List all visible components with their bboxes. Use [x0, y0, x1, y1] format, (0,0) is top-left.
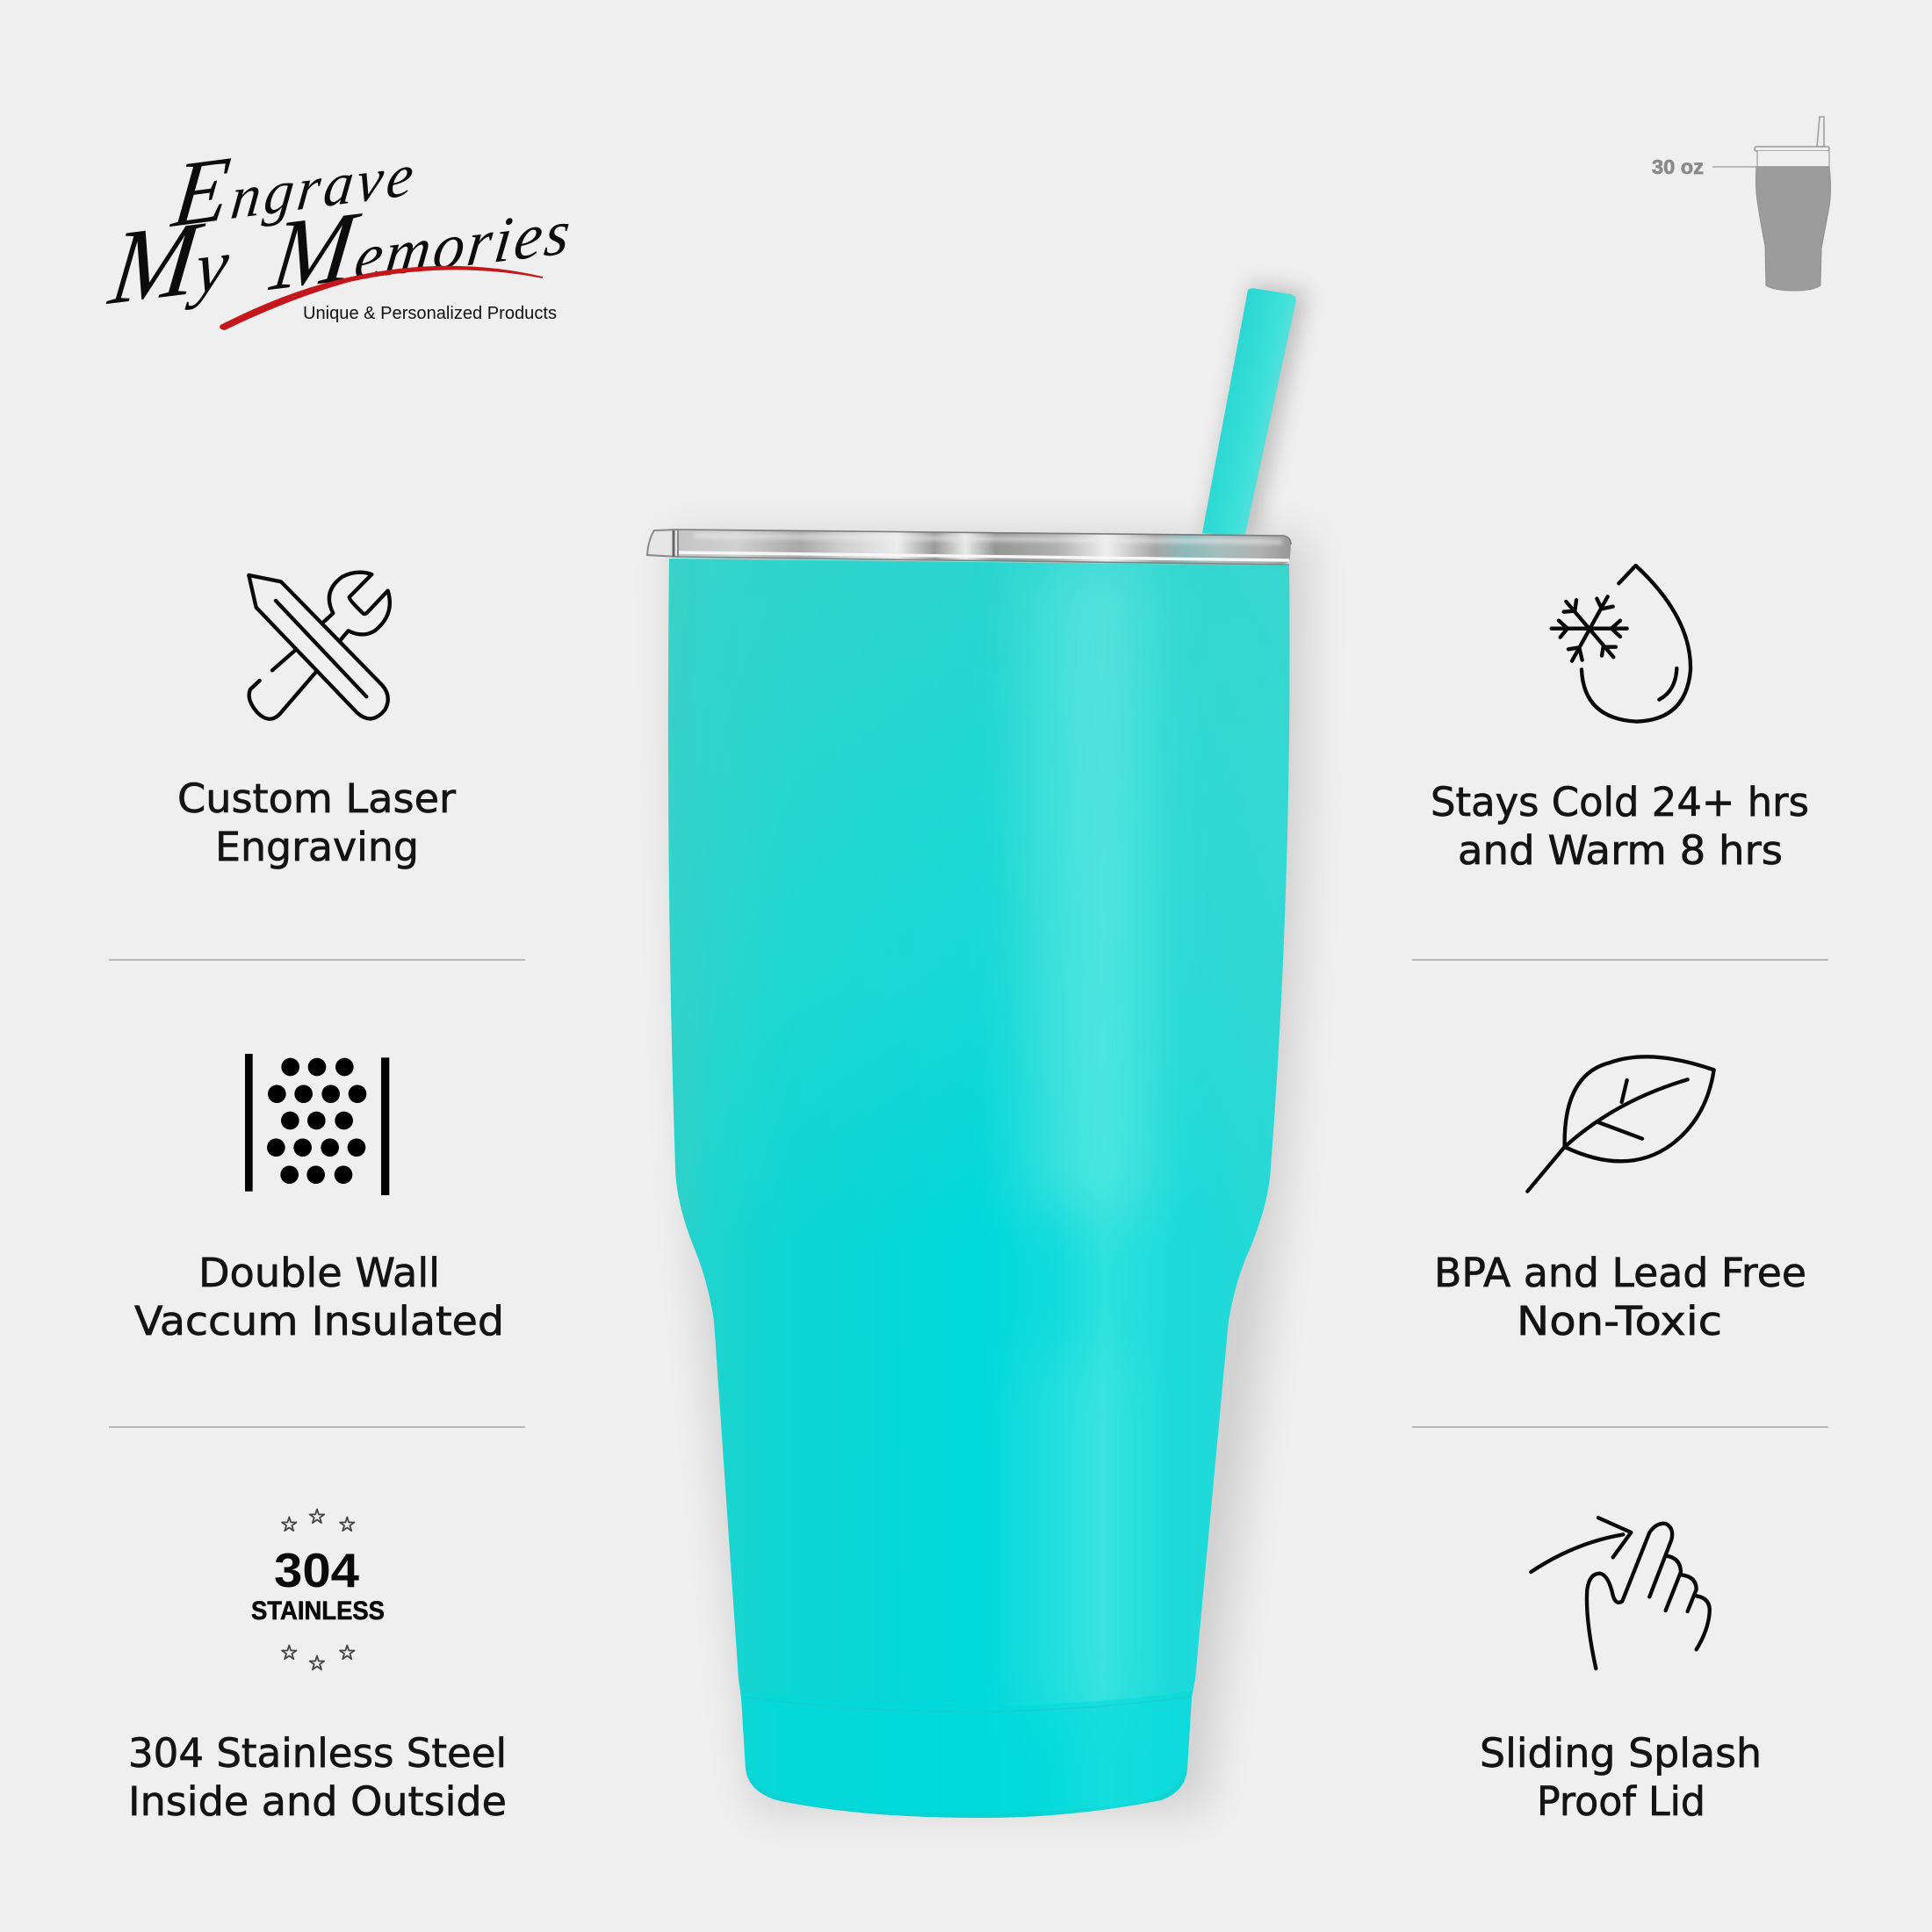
logo [103, 112, 580, 330]
icon: 304 stainless badge [251, 1509, 385, 1669]
label: Double Wall [198, 1250, 440, 1296]
label: BPA and Lead Free [1434, 1250, 1806, 1296]
icon: 304 stainless badge: STAINLESS [251, 1597, 385, 1626]
label [177, 775, 457, 870]
size indicator: 30 oz tumbler [1652, 117, 1830, 291]
tumbler body [650, 553, 1308, 1827]
logo red swoosh [220, 266, 543, 330]
label [128, 1730, 507, 1825]
tumbler product [647, 283, 1308, 1827]
label [1434, 1250, 1806, 1344]
label: Vaccum Insulated [134, 1298, 504, 1344]
logo wordmark: Engrave: Engrave [166, 112, 424, 247]
label: Non-Toxic [1517, 1298, 1722, 1344]
label [134, 1250, 504, 1344]
panel: 304 stainless steel [128, 1509, 507, 1825]
label: Custom Laser [177, 775, 457, 822]
logo wordmark: Memories: Memories [264, 163, 580, 312]
label: Inside and Outside [128, 1778, 507, 1825]
icon: hand swipe with arrow [1531, 1517, 1710, 1669]
label [1431, 779, 1809, 874]
icon: 304 stainless badge: 304 [274, 1543, 359, 1597]
panel: BPA and lead free [1434, 1056, 1806, 1344]
panel: stays cold and warm [1431, 566, 1809, 874]
label: and Warm 8 hrs [1458, 827, 1783, 874]
icon: crossed screwdriver and wrench [249, 573, 390, 719]
straw [1202, 288, 1296, 535]
panel: custom laser engraving [177, 573, 457, 870]
panel: sliding splash proof lid [1480, 1517, 1762, 1825]
lid [647, 530, 1291, 565]
label: Stays Cold 24+ hrs [1431, 779, 1809, 825]
label: 304 Stainless Steel [128, 1730, 507, 1777]
label: Proof Lid [1537, 1778, 1705, 1825]
tumbler shadow [674, 537, 1307, 1809]
label [1480, 1730, 1762, 1825]
label: Engraving [215, 824, 419, 870]
icon: leaf [1527, 1056, 1714, 1192]
logo wordmark: My: My [103, 195, 237, 327]
icon: water drop with snowflake [1552, 566, 1690, 722]
logo tagline: Unique & Personalized Products [303, 304, 557, 323]
icon: insulation dots between walls [245, 1054, 389, 1195]
size label: 30 oz [1652, 155, 1704, 178]
panel: double wall vacuum insulated [134, 1054, 504, 1344]
label: Sliding Splash [1480, 1730, 1762, 1777]
